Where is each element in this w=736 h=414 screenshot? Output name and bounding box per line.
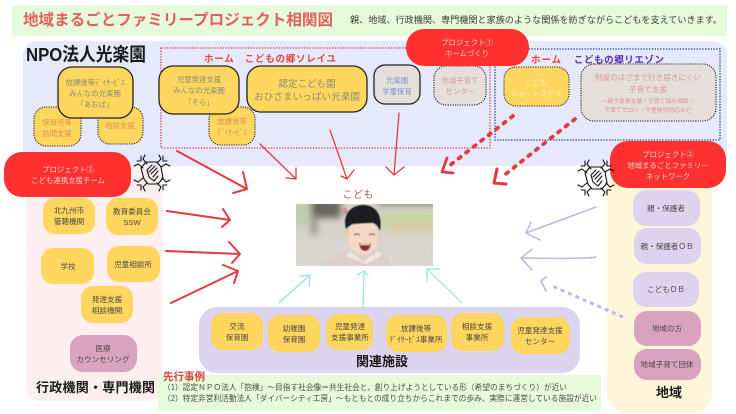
- box: 地域子育てセンター: 地域子育て: [442, 76, 478, 85]
- title: 地域まるごとファミリープロジェクト相関図: [23, 10, 333, 29]
- box: 光楽園学童保育: 学童保育: [382, 87, 412, 96]
- box: こどもショートステイ: こども: [525, 78, 547, 87]
- box: 発達支援相談機関: [81, 286, 133, 323]
- box: 相談支援: [98, 107, 143, 144]
- heading: ソレイユ: ホーム こどもの郷ソレイユ: [204, 53, 336, 65]
- heading: リエゾン: こどもの郷リエゾン: [574, 54, 664, 66]
- box: 地域子育て団体: 地域子育て団体: [640, 359, 694, 369]
- box: 認定こども園: [247, 66, 367, 112]
- box: 制度のはざま: ～親子食事支援・子育て悩み相談・: [602, 97, 694, 105]
- panel: NPO法人光楽園: [23, 41, 727, 166]
- arrow from 行政 middle: [166, 242, 240, 263]
- arrow from 学童保育: [386, 113, 404, 175]
- arrows: cyan from related facilities: [279, 269, 462, 309]
- box: そら: [159, 66, 239, 114]
- arrow from 親・保護者: [526, 207, 596, 240]
- box: 親・保護者OB: [634, 228, 701, 264]
- arrows: purple from community: [521, 207, 623, 317]
- box: 教育委員会SSW: SSW: [123, 218, 141, 227]
- box: 児童発達支援センター: [511, 317, 570, 354]
- panel: 地域: [607, 180, 712, 413]
- arrow from 行政 upper: [167, 209, 230, 227]
- dashed arrow from 地域の方: [541, 277, 623, 317]
- box: 医療カウンセリング: [70, 335, 137, 372]
- box: あおば: 「あおば」: [77, 100, 113, 109]
- box: そら: 「そら」: [184, 98, 214, 107]
- box: 幼稚園保育園: 幼稚園: [283, 323, 305, 333]
- box: こどもショートステイ: [504, 67, 569, 106]
- title banner: [12, 5, 727, 36]
- heading: 地域: 地域: [656, 385, 682, 400]
- dashed arrow from 制度のはざま: [494, 119, 575, 184]
- arrow left: [279, 275, 310, 303]
- box: 幼稚園保育園: [268, 315, 320, 352]
- box: 光楽園学童保育: [374, 65, 420, 104]
- arrow from 行政 lower: [171, 265, 238, 303]
- arrow from 認定こども園: [330, 130, 354, 179]
- box: 教育委員会SSW: [106, 198, 158, 235]
- box: 教育委員会SSW: 教育委員会: [113, 206, 151, 216]
- box: 保育所等訪問支援: 訪問支援: [42, 129, 72, 138]
- heading: 関連施設: 関連施設: [356, 354, 408, 369]
- box: 制度のはざま: [581, 64, 716, 121]
- heading: NPO法人光楽園: NPO法人光楽園: [26, 44, 146, 65]
- box: 親・保護者: [633, 190, 700, 226]
- heading: リエゾン: ホーム: [531, 55, 561, 66]
- text: 事例1: （1）認定ＮＰＯ法人「抱樸」～目指す社会像＝共生社会と、創り上げようとしている形（希望のまちづくり）が近い: [163, 382, 567, 392]
- panel: 行政機関・専門機関: [26, 166, 162, 401]
- project 3 pill: プロジェクト③: [42, 165, 94, 174]
- panel: ホーム こどもの郷リエゾン: [495, 49, 720, 140]
- project 1 pill: [406, 29, 529, 66]
- project 1 pill: ホームづくり: [445, 49, 489, 58]
- arrow right: [427, 269, 462, 303]
- box: 交流保育園: 保育園: [226, 332, 248, 342]
- box: 地域の方: 地域の方: [652, 323, 683, 333]
- project 2 pill: [610, 141, 726, 188]
- icon: joined hands left: [134, 155, 170, 191]
- box: 児童相談所: 児童相談所: [114, 259, 152, 269]
- box: 児童発達支援事業所: 支援事業所: [331, 332, 369, 342]
- box: 医療カウンセリング: 医療: [95, 343, 111, 353]
- box: 光楽園学童保育: 光楽園: [386, 76, 408, 85]
- box: 放課後等デイサービス: 放課後等: [217, 117, 247, 126]
- box: 保育所等訪問支援: [34, 107, 81, 146]
- arrow centre: [357, 271, 368, 309]
- box: 児童発達支援事業所: 児童発達: [335, 321, 366, 331]
- panel: 先行事例: [158, 370, 601, 411]
- box: 相談支援: 相談支援: [105, 121, 135, 130]
- box: 制度のはざま: 制度のはざまで行き届きにくい: [595, 72, 701, 82]
- box: 保育所等訪問支援: 保育所等: [42, 118, 72, 127]
- heading: 先行事例: 先行事例: [163, 370, 205, 383]
- box: 北九州市管轄機関: 北九州市: [54, 205, 85, 215]
- photo: laughing child: [296, 204, 433, 266]
- project 1 pill: プロジェクト①: [441, 38, 493, 47]
- box: こどもショートステイ: ショートステイ: [510, 89, 562, 98]
- box: 交流保育園: [211, 313, 263, 350]
- box: 相談支援事業所: 相談支援: [462, 321, 493, 331]
- box: 放課後等デイサービス: ﾃﾞｲｻｰﾋﾞｽ: [217, 128, 247, 137]
- arrows: red dashed from project 1: [442, 116, 575, 184]
- box: 北九州市管轄機関: 管轄機関: [54, 216, 84, 226]
- box: 児童発達支援センター: センター: [525, 337, 555, 346]
- box: こどもOB: こどもＯＢ: [647, 285, 685, 294]
- box: 相談支援事業所: 事業所: [466, 332, 489, 342]
- box: 放課後等デイサービス事業所: [386, 315, 447, 352]
- box: 地域子育てセンター: センター: [445, 87, 475, 96]
- box: あおば: [58, 67, 133, 118]
- box: 認定こども園: おひさまいっぱい光楽園: [254, 91, 360, 103]
- box: 制度のはざま: 子育てサロン・不登校児対応など: [605, 106, 692, 114]
- text: 事例2: （2）特定非営利活動法人「ダイバーシティ工房」～もともとの成り立ちからこれまでの歩み、実際に運営している施設が近い: [163, 393, 597, 403]
- box: あおば: 放課後等ﾃﾞｲｻｰﾋﾞｽ: [65, 78, 125, 87]
- box: そら: みんなの光楽園: [173, 86, 225, 95]
- box: 児童発達支援センター: 児童発達支援: [517, 325, 563, 335]
- heading: リエゾン: [531, 54, 664, 66]
- arrow from NPO panel: [177, 151, 247, 193]
- project 2 pill: ネットワーク: [646, 172, 690, 181]
- subtitle: 親、地域、行政機関、専門機関と家族のような関係を紡ぎながらこどもを支えていきます。: [350, 14, 722, 25]
- box: あおば: みんなの光楽園: [69, 89, 121, 98]
- heading: 行政機関・専門機関: 行政機関・専門機関: [36, 380, 155, 395]
- box: 放課後等デイサービス事業所: ﾃﾞｲｻｰﾋﾞｽ事業所: [389, 334, 443, 344]
- box: こどもOB: [633, 272, 699, 307]
- box: 児童相談所: [107, 246, 160, 282]
- box: 親・保護者: 親・保護者: [647, 203, 685, 213]
- box: 地域の方: [634, 311, 701, 346]
- arrow from そら: [260, 144, 296, 179]
- box: 学校: [41, 248, 94, 284]
- box: 認定こども園: 認定こども園: [278, 79, 336, 90]
- box: 放課後等デイサービス: [209, 107, 255, 145]
- box: 学校: 学校: [60, 261, 76, 271]
- box: 放課後等デイサービス事業所: 放課後等: [401, 323, 432, 333]
- project 3 pill: こども連携支援チーム: [31, 176, 105, 185]
- box: 交流保育園: 交流: [229, 321, 245, 331]
- box: 医療カウンセリング: カウンセリング: [76, 354, 130, 364]
- box: 幼稚園保育園: 保育園: [283, 334, 305, 344]
- box: そら: 児童発達支援: [177, 75, 222, 84]
- project 3 pill: [4, 152, 131, 197]
- label: こども: こども: [342, 189, 374, 201]
- box: 発達支援相談機関: 相談機関: [92, 305, 122, 315]
- icon: joined hands right: [578, 160, 614, 196]
- box: 親・保護者OB: 親・保護者ＯＢ: [640, 241, 694, 251]
- box: 制度のはざま: 子育て支援: [629, 84, 667, 94]
- project 2 pill: 地域まるごとファミリー: [627, 161, 709, 170]
- box: 地域子育て団体: [634, 349, 701, 380]
- arrows: red solid to child: [166, 113, 404, 303]
- panel: ホーム こどもの郷ソレイユ: [159, 48, 490, 148]
- box: 児童発達支援事業所: [326, 314, 373, 350]
- project 2 pill: プロジェクト②: [642, 150, 694, 159]
- panel: 関連施設: [199, 307, 580, 373]
- box: 相談支援事業所: [451, 313, 504, 351]
- box: 地域子育てセンター: [434, 66, 486, 105]
- arrow from 親・保護者OB: [521, 249, 596, 270]
- box: 発達支援相談機関: 発達支援: [92, 294, 123, 304]
- dashed arrow from 地域子育てセンター: [442, 116, 513, 173]
- box: 北九州市管轄機関: [43, 198, 95, 234]
